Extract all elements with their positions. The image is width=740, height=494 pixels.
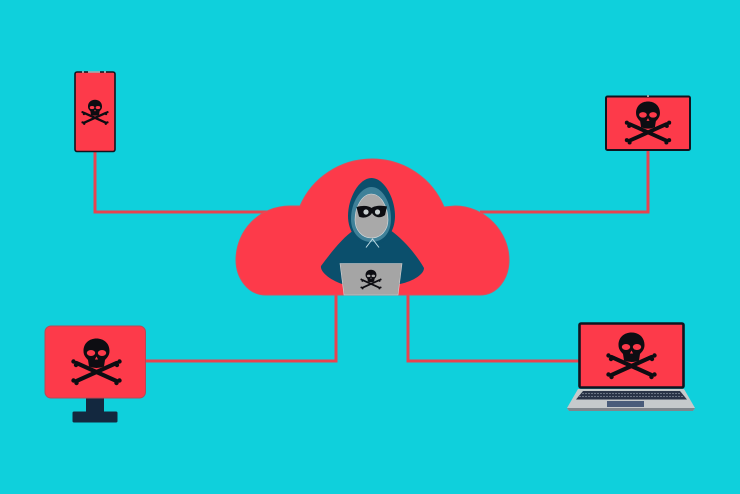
keyboard base [576, 391, 687, 400]
hacker body [321, 230, 424, 284]
keyboard keys [579, 394, 684, 396]
tablet camera dot [647, 95, 649, 97]
device: phone [75, 72, 115, 152]
line: monitor to cloud [146, 292, 336, 361]
hoodie drawstrings [366, 239, 379, 248]
device: tablet [606, 95, 690, 150]
laptop front lip [567, 408, 695, 411]
line: tablet to cloud [480, 150, 648, 212]
phone top notch [82, 71, 108, 73]
hood [348, 178, 395, 245]
line: phone to cloud [95, 150, 270, 212]
laptop screen [580, 324, 684, 388]
line: laptop to cloud [408, 292, 580, 361]
icon: skull on phone [81, 100, 109, 125]
phone body [75, 72, 115, 152]
icon: skull on hacker laptop [360, 270, 382, 289]
tablet body [606, 96, 690, 150]
hacker figure [321, 178, 424, 284]
icon: skull on laptop [606, 332, 657, 379]
device: laptop [567, 324, 695, 411]
mask eyes [363, 209, 380, 215]
trackpad [607, 401, 644, 407]
keyboard [576, 391, 687, 400]
cloud [236, 159, 509, 295]
device: desktop monitor [45, 326, 146, 422]
icon: skull on tablet [625, 102, 671, 145]
laptop lid [340, 264, 402, 295]
monitor base [72, 412, 118, 422]
hood inner ring [351, 187, 391, 242]
monitor stand [86, 397, 104, 412]
mask [356, 206, 387, 218]
laptop deck [567, 389, 695, 411]
icon: skull on monitor [71, 338, 122, 385]
face [355, 194, 388, 238]
connector lines [95, 150, 648, 361]
hacker laptop [340, 264, 402, 295]
monitor screen [45, 326, 146, 398]
